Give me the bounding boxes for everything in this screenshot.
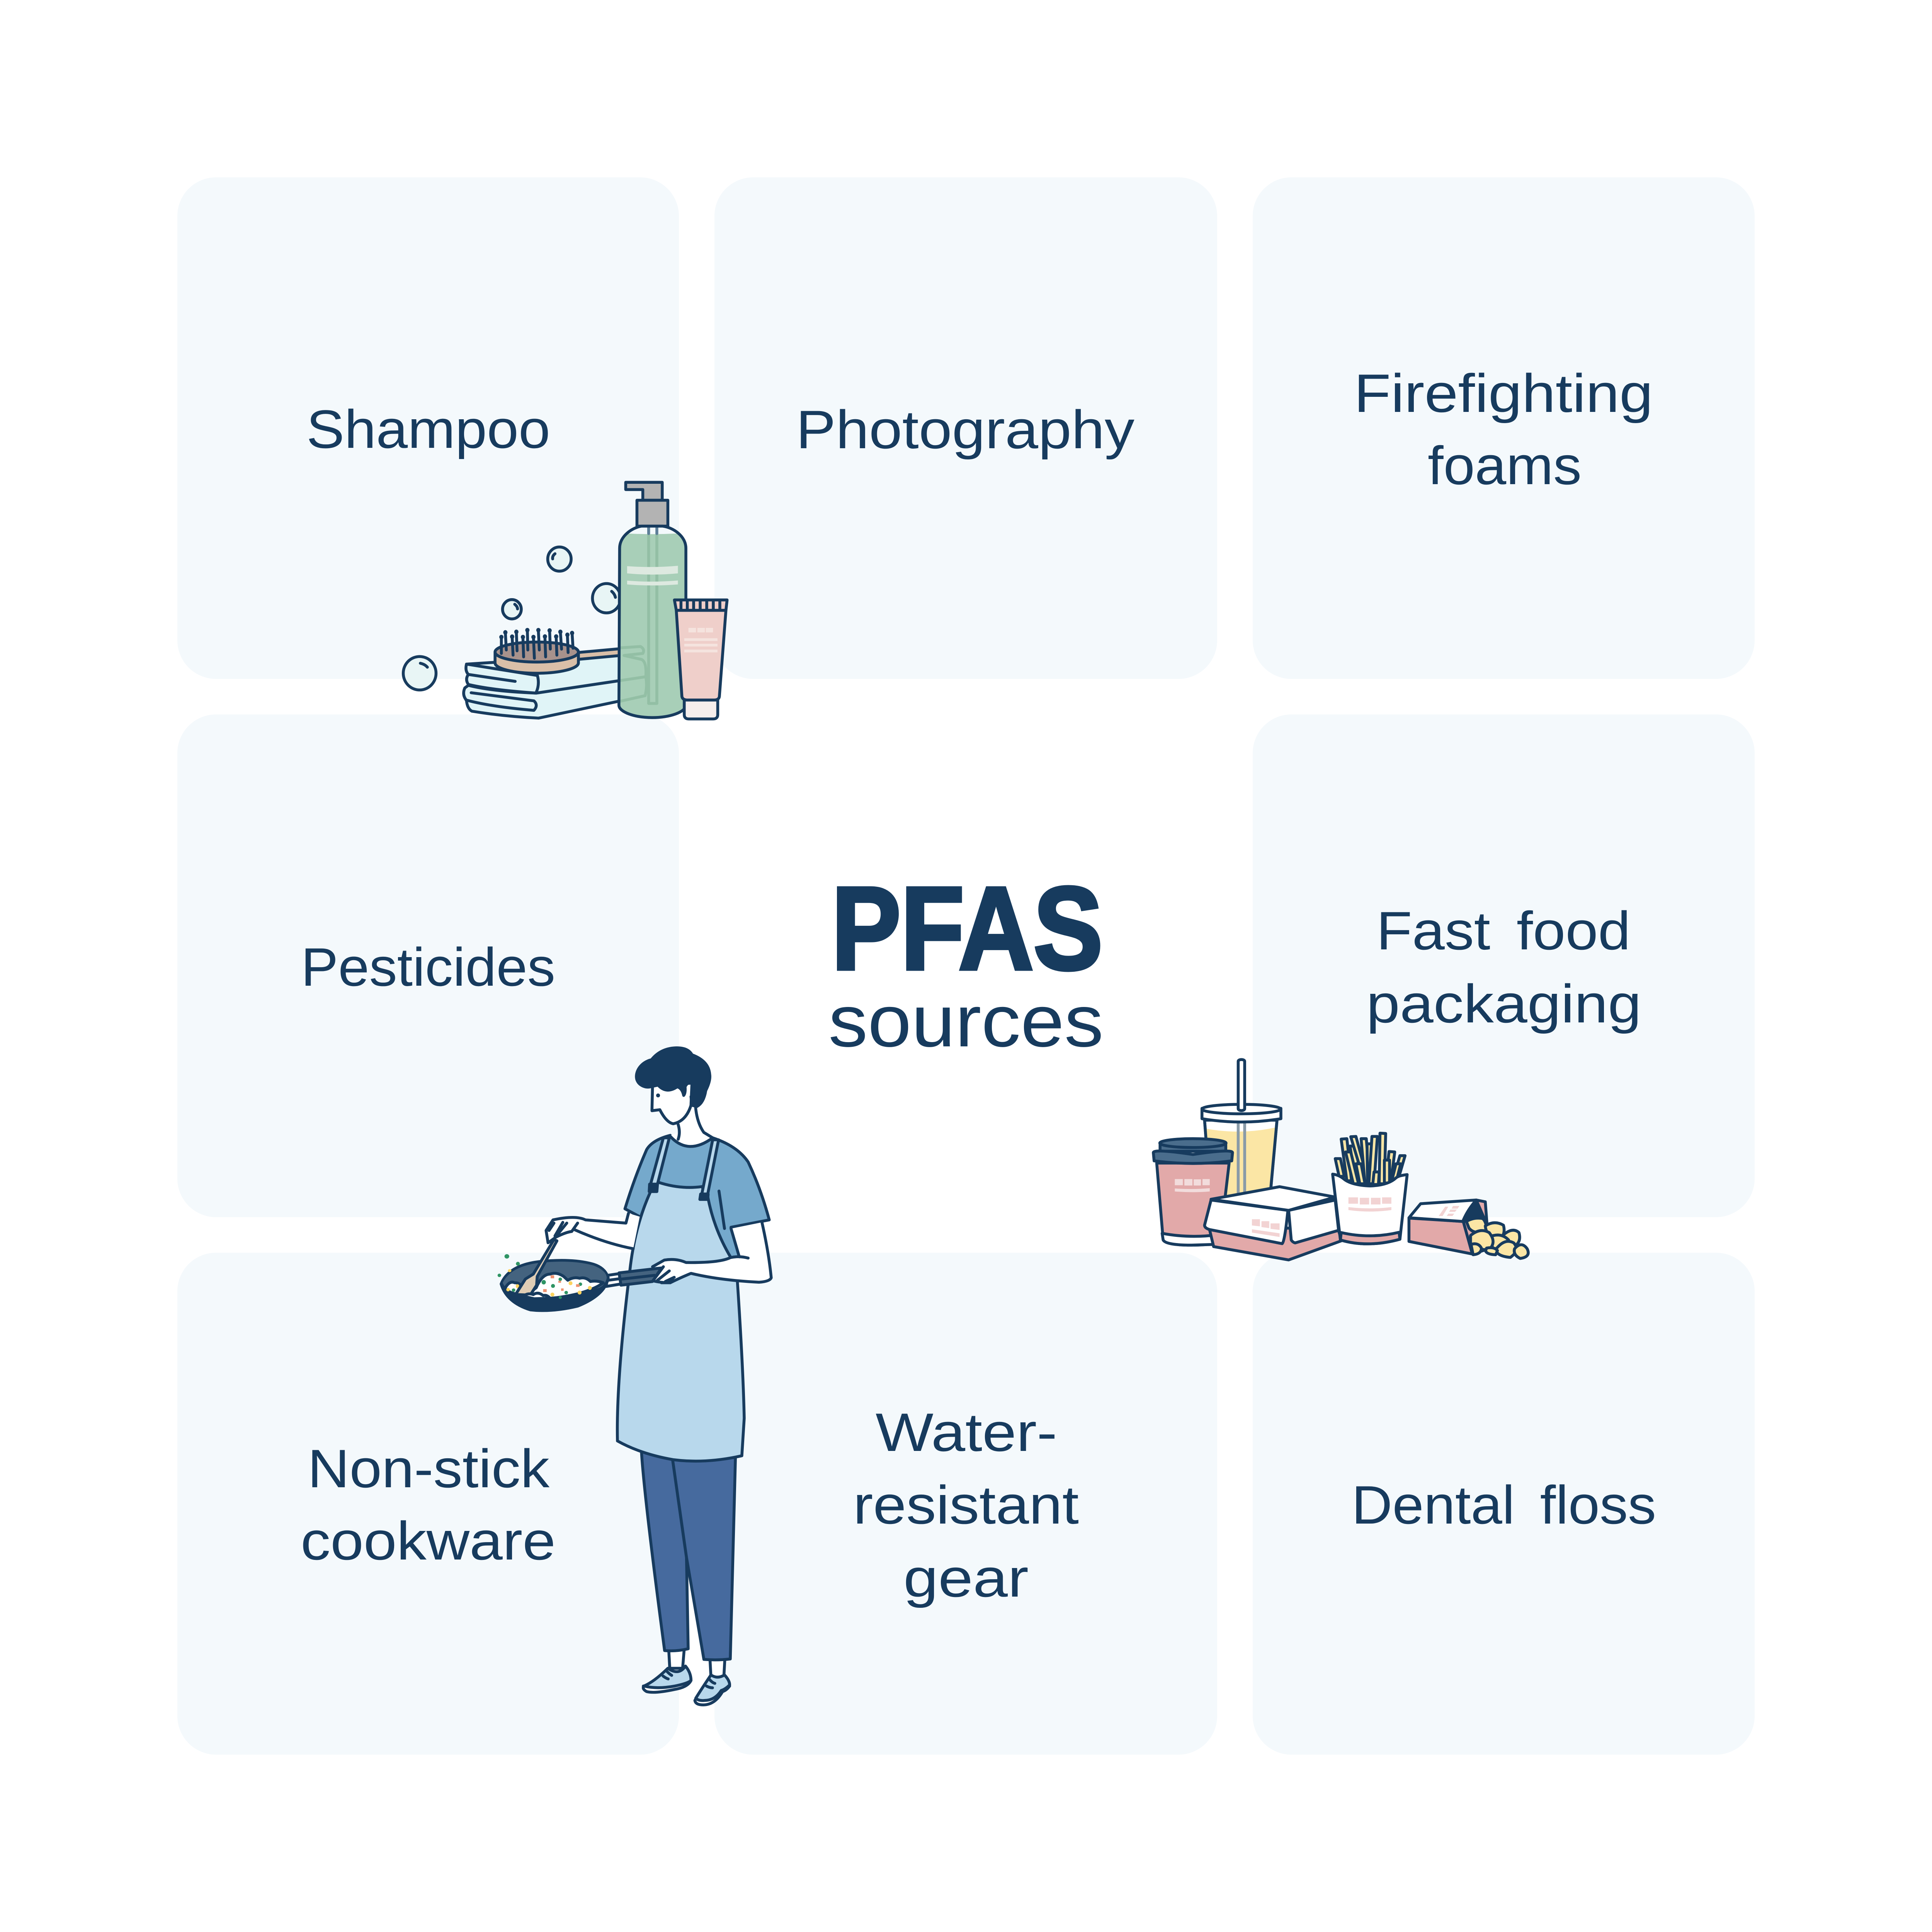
right shoe bbox=[723, 1686, 730, 1692]
label: Non-stick cookware: Non-stick bbox=[308, 1438, 550, 1499]
panel: dental floss bbox=[1253, 1253, 1755, 1755]
right trouser leg bbox=[672, 1458, 735, 1660]
face bbox=[652, 1083, 692, 1124]
spatula bbox=[515, 1240, 557, 1295]
label: Fast food packaging: packaging bbox=[1366, 973, 1641, 1034]
right hand fingers bbox=[653, 1267, 675, 1282]
title word: PFAS: PFAS bbox=[832, 862, 1103, 994]
apron straps bbox=[651, 1138, 719, 1194]
frying pan bbox=[498, 1240, 662, 1311]
title: PFAS sources bbox=[828, 862, 1104, 1062]
panel: fast food packaging bbox=[1253, 714, 1755, 1217]
left arm and hand bbox=[546, 1213, 640, 1249]
left shoe bbox=[643, 1680, 691, 1692]
icon: french fries bbox=[1333, 1133, 1407, 1244]
label: Water-resistant gear: gear bbox=[903, 1548, 1029, 1608]
panel: non-stick cookware bbox=[177, 1253, 679, 1755]
neck bbox=[670, 1105, 713, 1146]
trousers and shoes bbox=[641, 1451, 735, 1705]
label: Non-stick cookware: cookware bbox=[301, 1510, 556, 1571]
hair bbox=[636, 1048, 710, 1107]
label: Pesticides: Pesticides bbox=[301, 937, 555, 997]
panel: water-resistant gear bbox=[714, 1253, 1217, 1755]
icon: pump bottle bbox=[619, 482, 686, 718]
subtitle word: sources: sources bbox=[828, 980, 1104, 1062]
panel: pesticides bbox=[177, 714, 679, 1217]
label: Firefighting foams: foams bbox=[1428, 435, 1582, 496]
label: Firefighting foams: Firefighting bbox=[1354, 363, 1653, 423]
label: Dental floss: Dental floss bbox=[1352, 1475, 1656, 1535]
icon: cream tube bbox=[674, 600, 727, 719]
icon: burger box bbox=[1204, 1187, 1342, 1260]
nuggets bbox=[1466, 1218, 1528, 1259]
ankles bbox=[669, 1650, 725, 1677]
label: Water-resistant gear: Water- bbox=[876, 1402, 1057, 1463]
icon: stacked towels bbox=[464, 654, 646, 718]
icon: nugget bag bbox=[1409, 1200, 1528, 1259]
icon: drink cup with straw bbox=[1202, 1060, 1281, 1206]
rice and vegetables bbox=[505, 1273, 603, 1299]
apron bbox=[617, 1182, 744, 1461]
label: Fast food packaging: Fast food bbox=[1376, 900, 1631, 961]
illustration: person cooking bbox=[498, 1048, 771, 1705]
left trouser leg bbox=[641, 1451, 688, 1651]
illustration: fast food bbox=[1153, 1060, 1528, 1260]
panel: firefighting foams bbox=[1253, 177, 1755, 679]
right arm bbox=[653, 1222, 771, 1283]
icon: hair brush bbox=[495, 628, 644, 673]
panel: photography bbox=[714, 177, 1217, 679]
icon: coffee cup bbox=[1153, 1139, 1233, 1245]
icon: bubbles bbox=[403, 547, 621, 690]
illustration: shampoo, brush and towels bbox=[403, 482, 727, 719]
label: Photography: Photography bbox=[796, 399, 1134, 460]
panel: shampoo bbox=[177, 177, 679, 679]
label: Shampoo: Shampoo bbox=[306, 399, 550, 459]
t-shirt bbox=[625, 1135, 769, 1260]
label: Water-resistant gear: resistant bbox=[853, 1475, 1079, 1535]
flying food bits bbox=[498, 1254, 520, 1277]
